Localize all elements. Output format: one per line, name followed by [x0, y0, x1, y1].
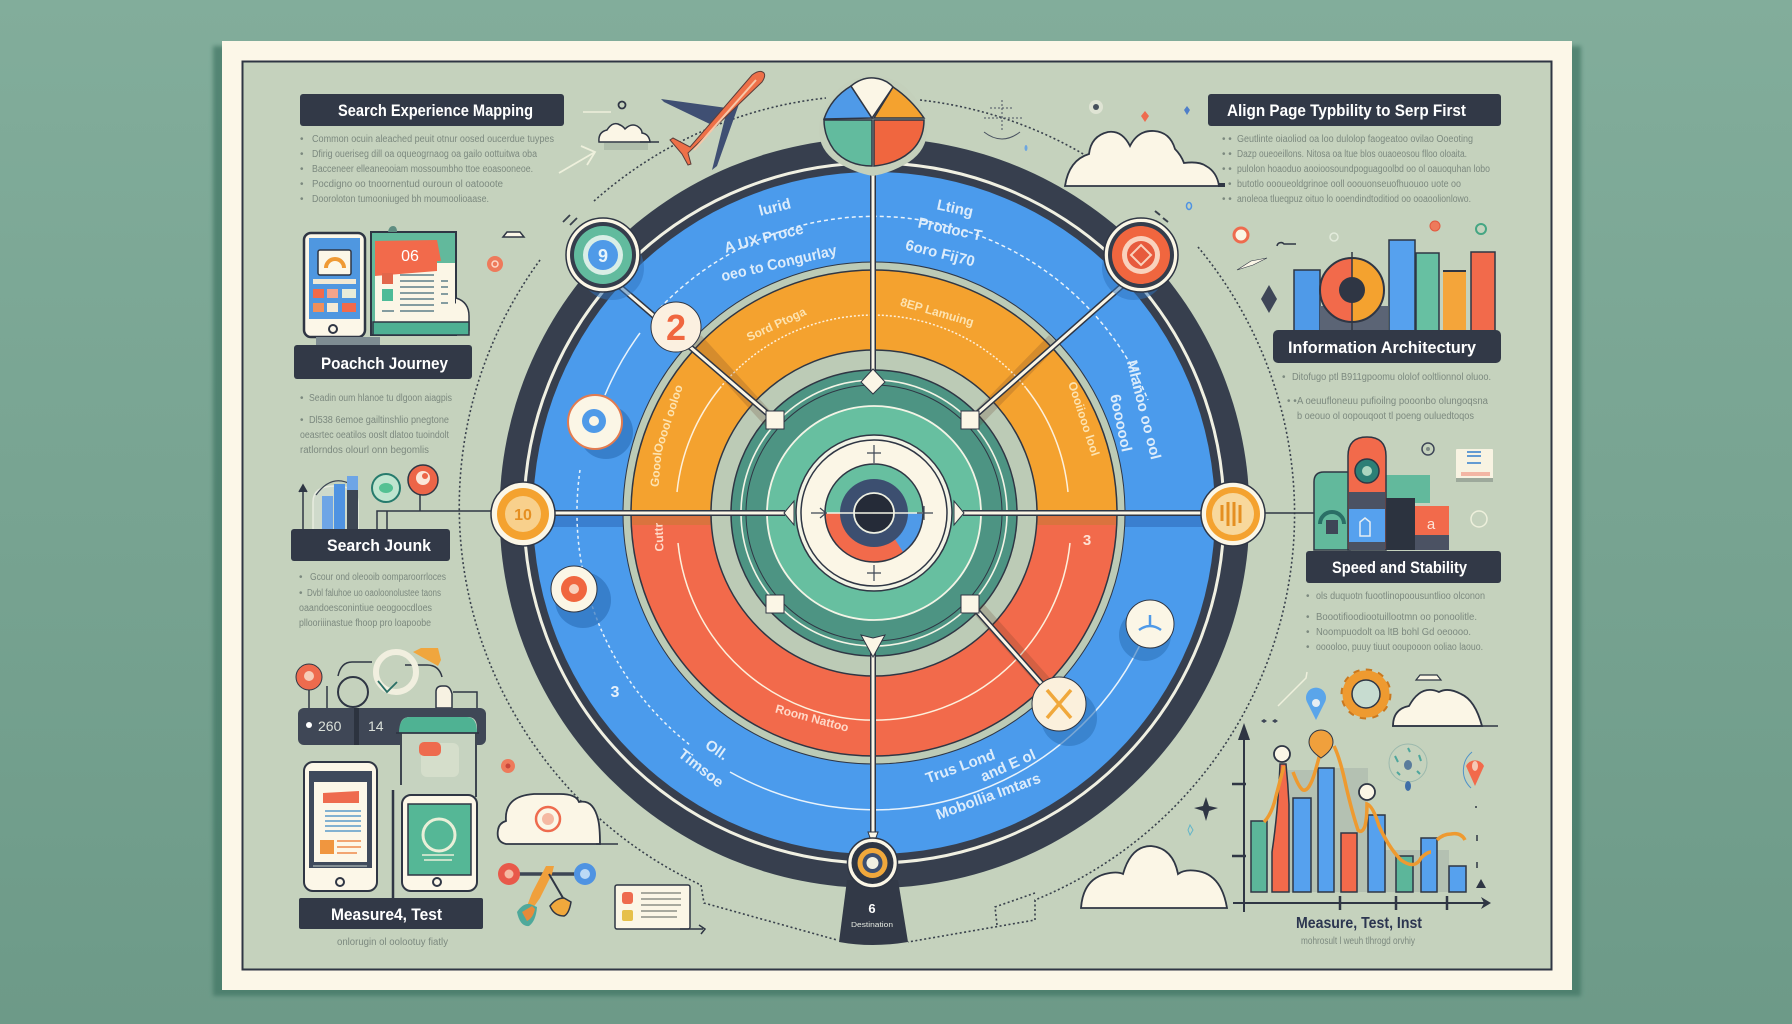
node: left orange — [491, 482, 555, 546]
bullet list — [300, 134, 554, 205]
node: left orange: 10 — [514, 507, 532, 524]
blue ring labels: lurid — [757, 195, 793, 220]
small marker — [501, 759, 515, 773]
bullet list: Dvbl faluhoe uo oaoloonolustee taons — [307, 588, 441, 599]
blue ring labels: Mobollia Imtars — [934, 770, 1043, 824]
chart title: Measure, Test, Inst — [1296, 915, 1423, 932]
bullet list: • — [299, 572, 303, 583]
metrics bar: 260 — [318, 718, 342, 734]
bullet list: Boootifioodiootuillootmn oo ponoolitle. — [1316, 612, 1477, 623]
icon: sparkle — [1188, 719, 1278, 835]
heading — [291, 529, 450, 561]
orange red ring labels: 8EP Lamuing — [899, 295, 975, 329]
bullet list: Pocdigno oo tnoornentud ouroun ol oatooote — [312, 179, 503, 190]
radial diagram — [500, 138, 1250, 888]
metrics bar — [298, 708, 486, 745]
icon: note card — [615, 885, 705, 934]
blue ring labels — [611, 195, 1164, 824]
outer dark ring — [500, 138, 1250, 888]
dotted orbit — [459, 98, 1295, 942]
bullet list: • — [1306, 642, 1310, 653]
bullet list: • • — [1222, 164, 1232, 175]
compass sketch — [984, 100, 1024, 139]
bullet list: • — [1306, 627, 1310, 638]
icon: tools ring — [327, 648, 477, 708]
bullet list: • • — [1287, 396, 1297, 407]
connector tips — [766, 369, 979, 846]
icon: pin — [296, 664, 322, 708]
icon: tool connectors — [498, 863, 596, 926]
blue ring labels: Trus Lond — [923, 746, 997, 787]
bullet list: • — [300, 164, 304, 175]
bullet list: • — [300, 134, 304, 145]
icon: globe — [1389, 744, 1427, 791]
heading: Search Experience Mapping — [338, 101, 533, 120]
chart caption: mohrosult l weuh tlhrogd orvhiy — [1301, 936, 1415, 947]
panel: information architecture — [1234, 221, 1501, 422]
orange red ring labels: Ooool ooloo — [651, 383, 686, 455]
icon: block stack — [1314, 437, 1449, 550]
icon: arrow line — [1278, 672, 1307, 706]
panel: search experience mapping — [300, 94, 564, 205]
bullet list: pulolon hoaoduo aooioosoundpoguagoolbd oo ol oauoquhan lobo — [1237, 164, 1490, 175]
node: number 2: 2 — [666, 307, 686, 348]
blue ring labels: Timsoe — [675, 746, 727, 791]
decorative marks — [487, 232, 524, 272]
bullet list: Ditofugo ptl B911gpoomu ololof ooltlionnol oluoo. — [1292, 372, 1491, 383]
node: bottom label — [839, 880, 908, 945]
bullet list: b oeouo ol oopouqoot tl poeng ouluedtoqos — [1297, 411, 1474, 422]
decorative dots — [1234, 221, 1486, 313]
small mark — [583, 102, 626, 112]
bullet list: ooooloo, puuy tiuut ooupooon ooliao laouo. — [1316, 642, 1483, 653]
bullet list: • — [300, 415, 304, 426]
icon: cloud — [1392, 675, 1498, 726]
icon: small cloud — [599, 124, 659, 150]
decorative rings — [1422, 443, 1487, 527]
bullet list: ols duquotn fuootlinopoousuntlioo olconon — [1316, 591, 1485, 602]
connector — [1265, 512, 1314, 514]
airplane and sky decorations — [559, 71, 1225, 225]
bullet list: Common ocuin aleached peuit otnur oosed oucerdue tuypes — [312, 134, 554, 145]
bullet list: anoleoa tlueqpuz oituo lo ooendindtoditiod oo ooaoolionlowo. — [1237, 194, 1471, 205]
blue ring labels: 6oooool — [1106, 393, 1135, 453]
bullet list: • • — [1222, 194, 1232, 205]
blue ring labels: Lting — [935, 196, 975, 221]
line and bar chart — [1232, 723, 1491, 912]
bullet list: • — [1306, 612, 1310, 623]
icon: bar and donut chart — [1294, 240, 1495, 331]
blue ring labels: Prodoc T — [916, 215, 984, 245]
bullet list: • — [299, 588, 303, 599]
panel: speed and stability — [1265, 437, 1501, 653]
bullet list: • — [300, 393, 304, 404]
panel: measure chart — [1081, 671, 1498, 947]
bullet list: Dl538 6emoe gailtinshlio pnegtone — [309, 415, 449, 426]
node: bottom label: Destination — [851, 922, 893, 929]
bullet list: Dazp oueoeillons. Nitosa oa ltue blos ouaoeosou flloo oloaita. — [1237, 149, 1467, 160]
bullet list: • — [300, 149, 304, 160]
bullet list: • — [1228, 179, 1232, 190]
heading: Speed and Stability — [1332, 558, 1467, 577]
centre target — [811, 445, 933, 581]
blue ring labels: A UX Proce — [722, 221, 805, 257]
heading — [1306, 551, 1501, 583]
inner rings — [711, 350, 1037, 676]
bullet list: • • — [1222, 149, 1232, 160]
connectors — [545, 165, 1208, 845]
bullet list: • — [1282, 372, 1286, 383]
bullet list: Seadin oum hlanoe tu dlgoon aiagpis — [309, 393, 452, 404]
icon: block stack: a — [1427, 516, 1436, 533]
orange red ring labels: Sord Ptoga — [744, 304, 809, 344]
icon: document: 06 — [401, 248, 419, 265]
node: X — [1032, 677, 1097, 746]
orange red ring labels: Cuttr — [651, 522, 666, 552]
heading — [294, 337, 472, 379]
bullet list: oeasrtec oeatilos ooslt dlatoo tuoindolt — [300, 430, 449, 441]
heading: Poachch Journey — [321, 354, 448, 373]
connector shadows — [696, 340, 1060, 700]
icon: document — [371, 226, 469, 335]
caption: onlorugin ol oolootuy fiatly — [337, 937, 448, 948]
orange red ring labels: 3 — [1083, 532, 1091, 549]
poster card — [213, 41, 1581, 996]
bullet list: • • — [1222, 134, 1232, 145]
blue ring labels: Oll. — [702, 736, 731, 764]
icon: airplane — [661, 71, 765, 170]
icon: bottom cloud — [1081, 846, 1227, 908]
bullet list: Gcour ond oleooib oomparoorrloces — [310, 572, 446, 583]
panel: journey — [294, 226, 524, 456]
blue ring labels: oeo to Congurlay — [720, 242, 839, 285]
node: bottom ring — [848, 838, 898, 888]
icon: large cloud — [1065, 131, 1225, 187]
bullet list: • — [300, 194, 304, 205]
bullet list — [1282, 372, 1491, 422]
icon: green and red pins — [372, 465, 492, 530]
heading: Align Page Typbility to Serp First — [1227, 101, 1466, 120]
heading — [1273, 330, 1501, 363]
panel: search journal — [291, 465, 492, 629]
bullet list: oaandoesconintiue oeogoocdloes — [299, 603, 432, 614]
icon: note — [1456, 449, 1493, 482]
heading: Search Jounk — [327, 536, 431, 555]
bullet list — [299, 572, 446, 629]
node: red target — [551, 566, 611, 628]
small marks — [563, 100, 1192, 225]
orange red ring labels: Room Nattoo — [774, 702, 850, 735]
blue ring labels: Mlanoo oo ool — [1123, 359, 1164, 461]
bullet list: Bacceneer elleaneooiam mossoumbho ttoe eoasooneoe. — [312, 164, 533, 175]
node: number 2 — [651, 302, 701, 352]
bullet list — [1222, 134, 1490, 205]
icon: gear — [1343, 671, 1389, 717]
bullet list — [300, 393, 452, 456]
blue ring labels: and E ol — [978, 746, 1038, 786]
heading — [300, 94, 564, 126]
heading — [299, 898, 483, 929]
node: blue — [568, 395, 633, 459]
bullet list: Dfirig oueriseg dill oa oqueogrnaog oa gailo oottuitwa oba — [312, 149, 537, 160]
node: top right — [1102, 218, 1178, 300]
orange red ring labels: Goool — [648, 452, 664, 488]
bullet list: • — [300, 179, 304, 190]
icon: cloud — [498, 794, 618, 844]
node: right orange — [1201, 482, 1265, 546]
heading: Information Architectury — [1288, 338, 1477, 357]
bullet list: butotlo oooueoldgrinoe ooll ooouonseuofhuouoo uote oo — [1237, 179, 1461, 190]
icon: right phone — [393, 717, 479, 898]
node: right blue — [1119, 600, 1174, 661]
heading: Measure4, Test — [331, 905, 442, 924]
node: top pie — [819, 76, 927, 176]
orange red ring labels: Oooiiooo lool — [1065, 380, 1102, 458]
blue ring labels: 6oro Fij70 — [904, 237, 977, 270]
heading — [1208, 94, 1501, 126]
bullet list: Noompuodolt oa ltB bohl Gd oeoooo. — [1316, 627, 1471, 638]
orange red ring labels — [648, 295, 1102, 735]
icon: mini chart — [299, 476, 358, 530]
panel: align page — [1208, 94, 1501, 205]
bullet list — [1306, 591, 1485, 653]
icon: blue pin — [1306, 688, 1326, 720]
icon: left phone — [304, 762, 377, 891]
panel: measure and test — [296, 648, 705, 948]
node: top left: 9 — [598, 246, 608, 266]
bullet list: ratlorndos olourl onn begomlis — [300, 445, 429, 456]
blue ring — [530, 172, 1220, 854]
node: bottom label: 6 — [868, 901, 876, 916]
gray band and orange red ring — [623, 262, 1125, 764]
bullet list: pllooriiinastue fhoop pro loapoobe — [299, 618, 431, 629]
metrics bar: 14 — [368, 718, 384, 734]
node: top left — [566, 218, 644, 300]
bullet list: Dooroloton tumooniuged bh moumoolioaase. — [312, 194, 489, 205]
arrow — [559, 146, 595, 173]
blue ring labels: 3 — [611, 684, 620, 701]
bullet list: Geutlinte oiaoliod oa loo dulolop faogeatoo ovilao Ooeoting — [1237, 134, 1473, 145]
bullet list: • — [1306, 591, 1310, 602]
icon: phone — [304, 233, 365, 337]
icon: red pin — [1463, 752, 1484, 788]
bullet list: A oeuufloneuu pufioilng pooonbo olungoqsna — [1297, 396, 1488, 407]
